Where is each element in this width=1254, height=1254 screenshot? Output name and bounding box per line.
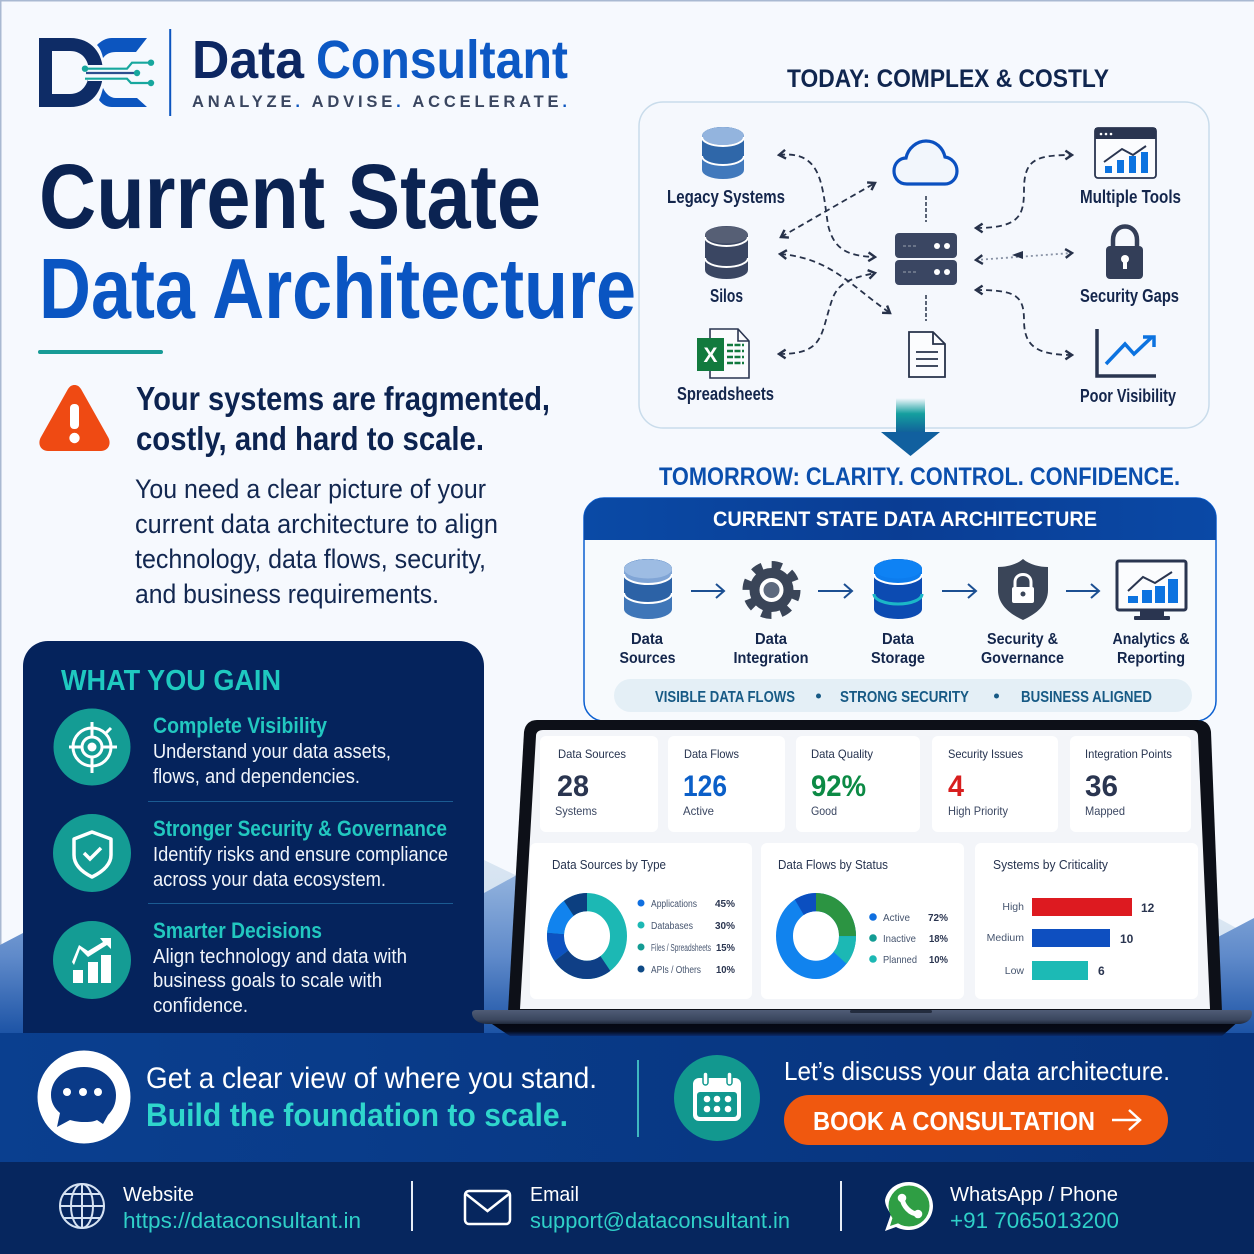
step: analytics and reporting: [1112, 561, 1190, 667]
kpi: security issues: Security Issues: [948, 747, 1023, 761]
legend: flow status: Planned: [883, 954, 917, 966]
legend: source types: Applications: [651, 899, 697, 910]
legend: flow status: 18%: [929, 933, 949, 945]
kpi: data quality: 92%: [811, 770, 866, 803]
contact: email: Email: [530, 1183, 579, 1206]
legend: source types: 10%: [716, 964, 736, 976]
brand name: Data: [192, 30, 305, 90]
item: complete visibility: [54, 708, 391, 788]
icon: cloud: [894, 141, 957, 184]
arrow: [691, 584, 724, 598]
legend: source types: [638, 898, 736, 976]
icon: calendar: [674, 1055, 760, 1141]
icon: lock: [1106, 226, 1143, 279]
problem headline: [136, 380, 550, 457]
problem paragraph: current data architecture to align: [135, 509, 498, 539]
step: data storage: [871, 559, 925, 667]
item: smarter decisions: business goals to scale with: [153, 970, 382, 992]
consultation prompt: Let’s discuss your data architecture.: [784, 1056, 1170, 1086]
legend: source types: 30%: [715, 920, 736, 932]
bar chart: criticality: 10: [1120, 932, 1134, 946]
icon: spreadsheet: X: [703, 344, 718, 367]
item: smarter decisions: [53, 918, 407, 1017]
step: security and governance: Governance: [981, 650, 1064, 667]
kpi: security issues: High Priority: [948, 804, 1008, 818]
item: stronger security: Stronger Security & Governance: [153, 816, 447, 841]
kpi: security issues: [932, 736, 1058, 832]
legend: source types: APIs / Others: [651, 965, 701, 976]
icon: multiple tools: [1095, 128, 1156, 178]
panel heading: CURRENT STATE DATA ARCHITECTURE: [713, 508, 1097, 531]
heading: today: TODAY: COMPLEX & COSTLY: [787, 65, 1109, 93]
kpi: data sources: Systems: [555, 804, 597, 818]
bar chart: criticality: Medium: [987, 932, 1024, 944]
kpi: security issues: 4: [948, 770, 964, 803]
item: smarter decisions: Align technology and data with: [153, 946, 407, 968]
chart card: data flows by status: Data Flows by Status: [778, 858, 888, 872]
chart card: data flows by status: [761, 843, 964, 999]
tagline: ANALYZE. ADVISE. ACCELERATE.: [192, 93, 567, 111]
panel: current state architecture: [584, 498, 1216, 721]
item: stronger security: across your data ecosystem.: [153, 869, 386, 891]
arrow: [818, 584, 852, 598]
contact: website: https://dataconsultant.in: [123, 1208, 361, 1233]
chart card: data sources by type: Data Sources by Type: [552, 858, 666, 872]
contact: whatsapp: [885, 1182, 1119, 1233]
chart card: data sources by type: [530, 843, 752, 999]
laptop frame: [508, 720, 1222, 1012]
kpi: data sources: 28: [557, 770, 589, 803]
legend: flow status: 72%: [928, 912, 949, 924]
bar chart: criticality: 6: [1098, 964, 1105, 978]
laptop dashboard: [0, 720, 1254, 1162]
contact: email: support@dataconsultant.in: [530, 1208, 790, 1233]
step: analytics and reporting: Reporting: [1117, 650, 1185, 667]
label: silos: Silos: [710, 286, 743, 306]
brand name: [192, 30, 568, 90]
arrows: tangled flows: [779, 155, 1072, 355]
legend: source types: 15%: [716, 942, 736, 954]
laptop base: [472, 1010, 1252, 1024]
benefits pill: BUSINESS ALIGNED: [1021, 689, 1152, 706]
icon: spreadsheet: [697, 329, 749, 378]
contact: email: [465, 1183, 790, 1233]
contact: whatsapp: +91 7065013200: [950, 1208, 1119, 1233]
legend: flow status: Inactive: [883, 933, 916, 945]
kpi: integration points: [1070, 736, 1191, 832]
step: data sources: Data: [631, 631, 663, 648]
label: spreadsheets: Spreadsheets: [677, 384, 774, 404]
step: security and governance: [981, 559, 1064, 667]
kpi: integration points: Integration Points: [1085, 747, 1172, 761]
background mountains: [0, 853, 1254, 1033]
panel: what you gain: [23, 641, 484, 1040]
kpi: data quality: [796, 736, 920, 832]
benefits pill: VISIBLE DATA FLOWS: [655, 689, 795, 706]
problem paragraph: technology, data flows, security,: [135, 544, 486, 574]
arrow: today to tomorrow: [881, 398, 940, 456]
title: Current State: [39, 146, 541, 248]
legend: flow status: [869, 912, 949, 966]
bar chart: criticality: High: [1002, 901, 1024, 913]
button: book a consultation: [784, 1095, 1168, 1145]
kpi: data sources: Data Sources: [558, 747, 626, 761]
logo mark: [39, 38, 154, 107]
bar chart: criticality: 12: [1141, 901, 1155, 915]
item: smarter decisions: confidence.: [153, 995, 248, 1017]
item: smarter decisions: Smarter Decisions: [153, 918, 322, 943]
kpi: integration points: Mapped: [1085, 804, 1125, 818]
step: data integration: Data: [755, 631, 787, 648]
kpi: data flows: [668, 736, 785, 832]
item: complete visibility: Understand your data assets,: [153, 741, 391, 763]
call to action text: [146, 1062, 597, 1133]
legend: source types: Databases: [651, 921, 693, 932]
icon: server: [895, 233, 957, 285]
icon: document: [909, 332, 945, 377]
icon: chat bubble: [38, 1050, 130, 1144]
kpi: data flows: Data Flows: [684, 747, 739, 761]
legend: flow status: Active: [883, 912, 910, 924]
icon: silos database: [705, 226, 748, 279]
laptop shadow: [486, 1020, 1240, 1036]
heading: tomorrow: TOMORROW: CLARITY. CONTROL. CONFIDENCE.: [659, 463, 1180, 491]
item: stronger security: Identify risks and ensure compliance: [153, 844, 448, 866]
benefits pill: [614, 679, 1192, 712]
call to action text: Get a clear view of where you stand.: [146, 1062, 597, 1095]
icon: warning: [39, 385, 110, 451]
icon: legacy database: [702, 127, 744, 179]
title: Data Architecture: [39, 242, 636, 337]
problem paragraph: and business requirements.: [135, 579, 439, 609]
step: data sources: [620, 559, 676, 667]
step: data sources: Sources: [620, 650, 676, 667]
call to action band background: [0, 1033, 1254, 1162]
step: data storage: Data: [882, 631, 914, 648]
step: data integration: Integration: [734, 650, 808, 667]
problem paragraph: You need a clear picture of your: [135, 474, 486, 504]
contact: whatsapp: WhatsApp / Phone: [950, 1183, 1118, 1206]
brand name: Consultant: [316, 30, 568, 90]
item: stronger security: [53, 814, 448, 892]
item: complete visibility: flows, and dependencies.: [153, 766, 360, 788]
benefits pill: STRONG SECURITY: [840, 689, 970, 706]
problem headline: costly, and hard to scale.: [136, 420, 484, 457]
panel heading: WHAT YOU GAIN: [61, 665, 281, 697]
item: complete visibility: Complete Visibility: [153, 713, 327, 738]
step: analytics and reporting: Analytics &: [1112, 631, 1190, 648]
arrow: [1066, 584, 1099, 598]
button: book a consultation: BOOK A CONSULTATION: [813, 1106, 1095, 1136]
label: multiple tools: Multiple Tools: [1080, 187, 1181, 207]
label: legacy systems: Legacy Systems: [667, 187, 785, 207]
legend: flow status: 10%: [929, 954, 949, 966]
footer: [0, 1162, 1254, 1254]
panel: today diagram: [639, 102, 1209, 428]
bar chart: criticality: [987, 898, 1155, 980]
kpi: data sources: [540, 736, 658, 832]
chart card: systems by criticality: [975, 843, 1198, 999]
chart card: systems by criticality: Systems by Criticality: [993, 858, 1109, 872]
donut chart: flow status: [784, 902, 848, 970]
step: security and governance: Security &: [987, 631, 1058, 648]
kpi: data flows: 126: [683, 770, 727, 803]
icon: poor visibility: [1097, 329, 1156, 376]
kpi: data quality: Data Quality: [811, 747, 873, 761]
step: data integration: [734, 565, 808, 667]
step: data storage: Storage: [871, 650, 925, 667]
problem headline: Your systems are fragmented,: [136, 380, 550, 417]
label: poor visibility: Poor Visibility: [1080, 386, 1176, 406]
kpi: integration points: 36: [1085, 770, 1118, 803]
kpi: data quality: Good: [811, 804, 837, 818]
arrow: [942, 584, 976, 598]
call to action text: Build the foundation to scale.: [146, 1097, 568, 1133]
logo: [39, 29, 568, 116]
bar chart: criticality: Low: [1005, 965, 1024, 977]
title: [39, 146, 636, 337]
legend: source types: 45%: [715, 898, 736, 910]
donut chart: source types: [556, 902, 618, 970]
legend: source types: Files / Spreadsheets: [651, 943, 711, 954]
kpi: data flows: Active: [683, 804, 714, 818]
contact: website: Website: [123, 1183, 194, 1206]
label: security gaps: Security Gaps: [1080, 286, 1179, 306]
contact: website: [60, 1183, 361, 1233]
problem paragraph: [135, 474, 498, 609]
call to action content: [38, 1050, 1170, 1145]
